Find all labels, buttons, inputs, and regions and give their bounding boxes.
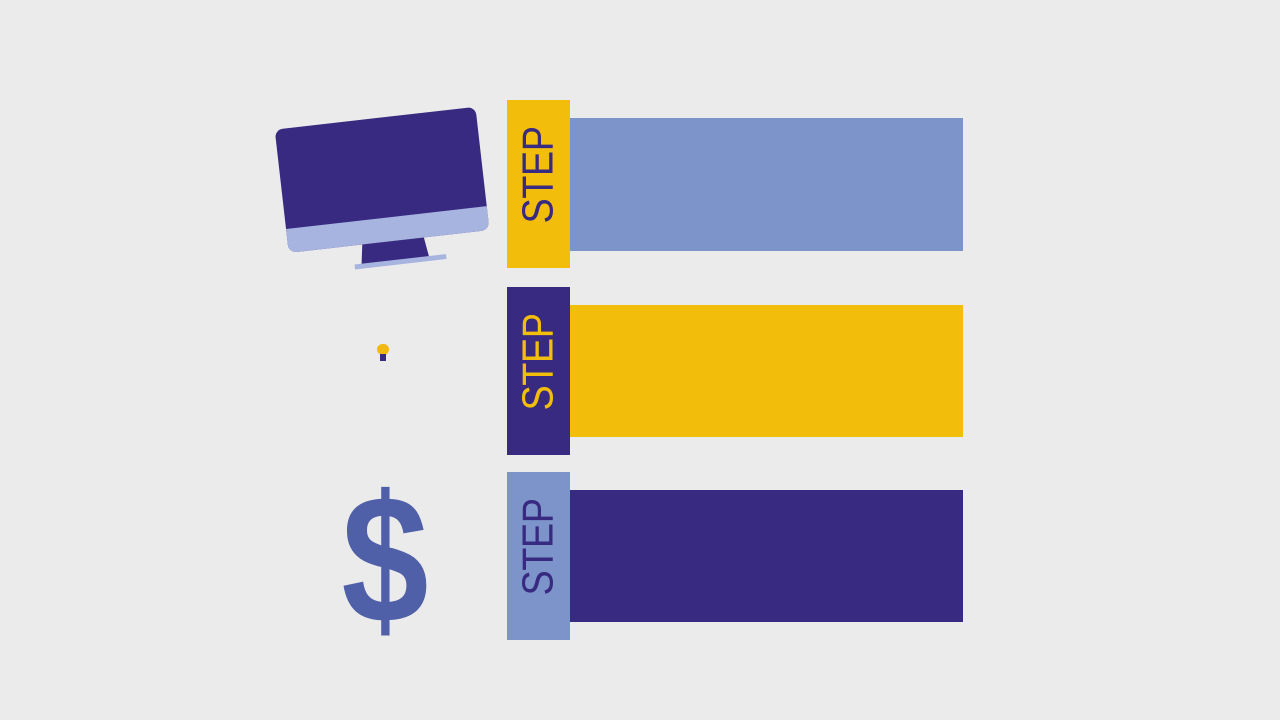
step 3 label bbox=[507, 472, 570, 640]
step 1 label: STEP bbox=[514, 126, 563, 224]
icon: light bulb bbox=[377, 344, 389, 361]
step 2 label: STEP bbox=[514, 313, 563, 411]
step 3 label: STEP bbox=[514, 498, 563, 596]
step 2 bbox=[507, 287, 963, 455]
step 2 label bbox=[507, 287, 570, 455]
step 1 bbox=[507, 100, 963, 268]
step 1 bar bbox=[570, 118, 963, 251]
step 3 bbox=[507, 472, 963, 640]
step 1 label bbox=[507, 100, 570, 268]
icon: monitor bbox=[276, 108, 489, 270]
step 3 bar bbox=[570, 490, 963, 622]
step 2 bar bbox=[570, 305, 963, 437]
icon: dollar sign: $ bbox=[341, 457, 429, 661]
